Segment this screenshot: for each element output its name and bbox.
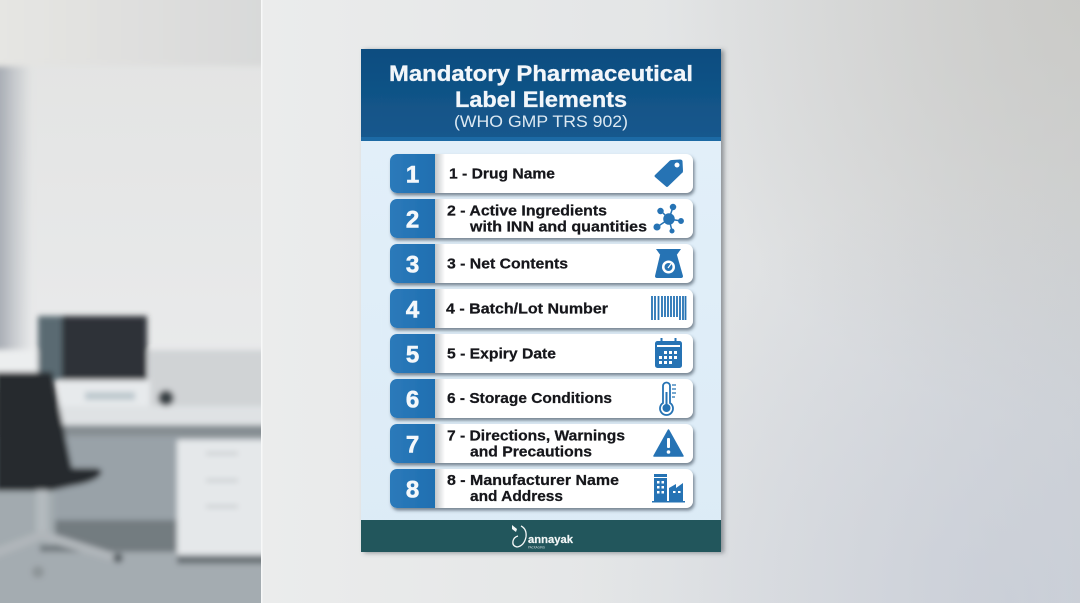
row 5: expiry date: 5 bbox=[406, 342, 419, 368]
icon: calendar bbox=[655, 338, 682, 368]
row 5: expiry date: 5 - Expiry Date bbox=[447, 346, 556, 362]
row 8: manufacturer: and Address bbox=[470, 488, 563, 505]
row 8: manufacturer bbox=[390, 469, 693, 508]
row 2: active ingredients: 2 - Active Ingredients bbox=[447, 202, 607, 220]
logo: PACKAGING bbox=[528, 546, 545, 550]
row 3: net contents bbox=[390, 244, 693, 283]
row 6: storage conditions: 6 bbox=[406, 386, 419, 414]
footer band bbox=[361, 520, 721, 552]
row 2: active ingredients: with INN and quantities bbox=[469, 219, 647, 236]
row 5: expiry date bbox=[390, 334, 693, 373]
row 4: batch number bbox=[390, 289, 693, 328]
row 2: active ingredients: 2 bbox=[406, 206, 419, 234]
row 3: net contents: 3 bbox=[406, 252, 419, 278]
row 1: drug name: 1 bbox=[406, 162, 419, 188]
icon: warning triangle bbox=[654, 430, 683, 456]
row 6: storage conditions bbox=[390, 379, 693, 418]
logo bbox=[512, 525, 574, 550]
icon: barcode bbox=[652, 296, 686, 320]
row 4: batch number: 4 - Batch/Lot Number bbox=[446, 300, 608, 318]
title: Label Elements bbox=[455, 87, 627, 112]
row 1: drug name bbox=[390, 154, 693, 193]
poster bbox=[361, 49, 721, 552]
row 4: batch number: 4 bbox=[406, 296, 420, 324]
icon: thermometer bbox=[660, 383, 676, 415]
icon: weighing scale bbox=[655, 249, 683, 278]
panel edge highlight bbox=[261, 0, 262, 603]
row 3: net contents: 3 - Net Contents bbox=[447, 256, 568, 272]
icon: molecule bbox=[654, 204, 683, 233]
title bbox=[389, 61, 693, 112]
row 8: manufacturer: 8 bbox=[406, 476, 419, 504]
logo: annayak bbox=[528, 534, 574, 546]
subtitle: (WHO GMP TRS 902) bbox=[454, 113, 628, 131]
title: Mandatory Pharmaceutical bbox=[389, 61, 693, 86]
blurred office photo panel bbox=[0, 0, 280, 603]
row 2: active ingredients bbox=[390, 199, 693, 238]
poster sheet bbox=[361, 49, 721, 552]
row 6: storage conditions: 6 - Storage Conditions bbox=[447, 390, 612, 407]
icon: factory buildings bbox=[652, 474, 685, 502]
row 7: directions: and Precautions bbox=[470, 444, 592, 460]
row 7: directions: 7 bbox=[406, 432, 419, 458]
row 1: drug name: 1 - Drug Name bbox=[449, 166, 555, 182]
row 8: manufacturer: 8 - Manufacturer Name bbox=[447, 472, 619, 489]
row 7: directions bbox=[390, 424, 693, 463]
row 7: directions: 7 - Directions, Warnings bbox=[447, 428, 625, 444]
icon: price tag bbox=[654, 160, 683, 187]
header band bbox=[361, 49, 721, 141]
